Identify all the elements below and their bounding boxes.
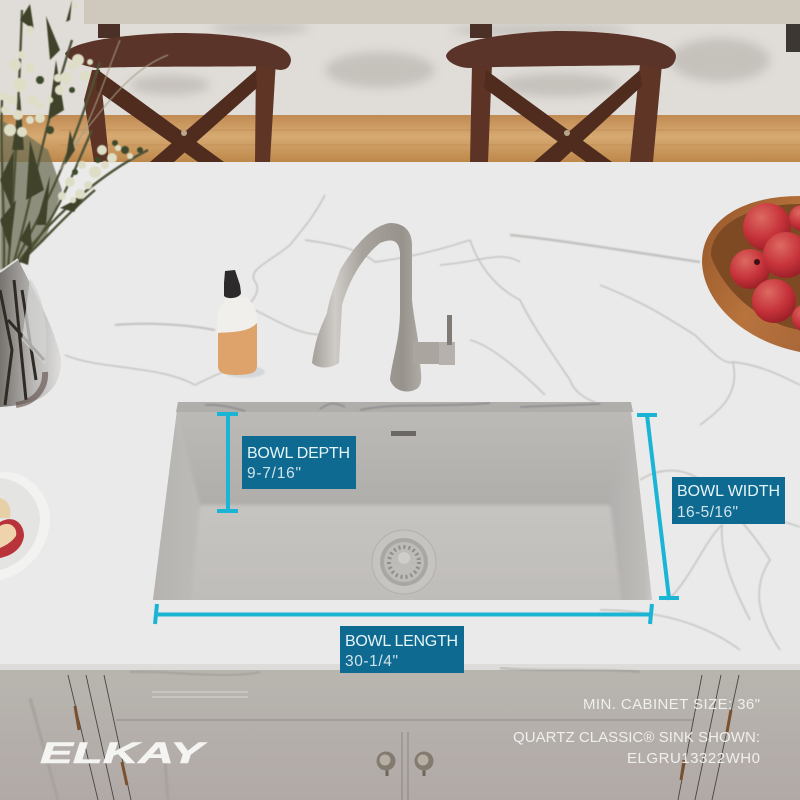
sink bbox=[145, 402, 660, 605]
dimension: bowl depth bbox=[217, 414, 356, 511]
marble veins bbox=[65, 195, 800, 650]
cabinet size and model text: MIN. CABINET SIZE: 36" bbox=[583, 696, 760, 713]
label: bowl length: BOWL LENGTH bbox=[345, 633, 458, 650]
dark furniture corner bbox=[786, 24, 800, 52]
rug background bbox=[0, 0, 800, 116]
soap bottle bbox=[217, 270, 265, 378]
wood floor bbox=[0, 115, 800, 163]
cabinet size and model text bbox=[513, 696, 760, 767]
chair left bbox=[65, 24, 291, 162]
marble countertop bbox=[0, 162, 800, 665]
soft basin surfaces bbox=[145, 405, 660, 605]
cabinet size and model text: ELGRU13322WH0 bbox=[627, 750, 760, 767]
chair right bbox=[446, 24, 676, 162]
logo: Elkay: ELKAY bbox=[40, 737, 208, 770]
label: bowl depth: BOWL DEPTH bbox=[247, 445, 350, 462]
cabinet bbox=[0, 668, 800, 800]
label: bowl depth bbox=[242, 436, 356, 489]
length line bbox=[155, 604, 652, 624]
counter edge bbox=[0, 664, 800, 672]
label: bowl length: 30-1/4" bbox=[345, 653, 398, 670]
cabinet knobs bbox=[376, 752, 434, 776]
depth line bbox=[217, 414, 238, 511]
label: bowl depth: 9-7/16" bbox=[247, 465, 301, 482]
label: bowl width: 16-5/16" bbox=[677, 504, 738, 521]
label: bowl width bbox=[672, 477, 785, 524]
label: bowl length bbox=[340, 626, 464, 673]
glass vase bbox=[0, 259, 61, 407]
label: bowl width: BOWL WIDTH bbox=[677, 483, 780, 500]
sink rim and basin bbox=[153, 402, 652, 600]
cabinet size and model text: QUARTZ CLASSIC® SINK SHOWN: bbox=[513, 729, 760, 746]
bench bbox=[84, 0, 800, 24]
brand plate bbox=[391, 431, 416, 436]
dimension: bowl length bbox=[155, 604, 652, 673]
plate with apple bbox=[0, 472, 50, 580]
veined top ledge bbox=[176, 402, 633, 412]
drain bbox=[372, 530, 436, 594]
bowl of apples bbox=[702, 196, 800, 352]
plant stems and flowers bbox=[0, 0, 168, 270]
width line bbox=[637, 415, 679, 598]
faucet bbox=[312, 223, 455, 392]
dimension: bowl width bbox=[637, 415, 785, 598]
